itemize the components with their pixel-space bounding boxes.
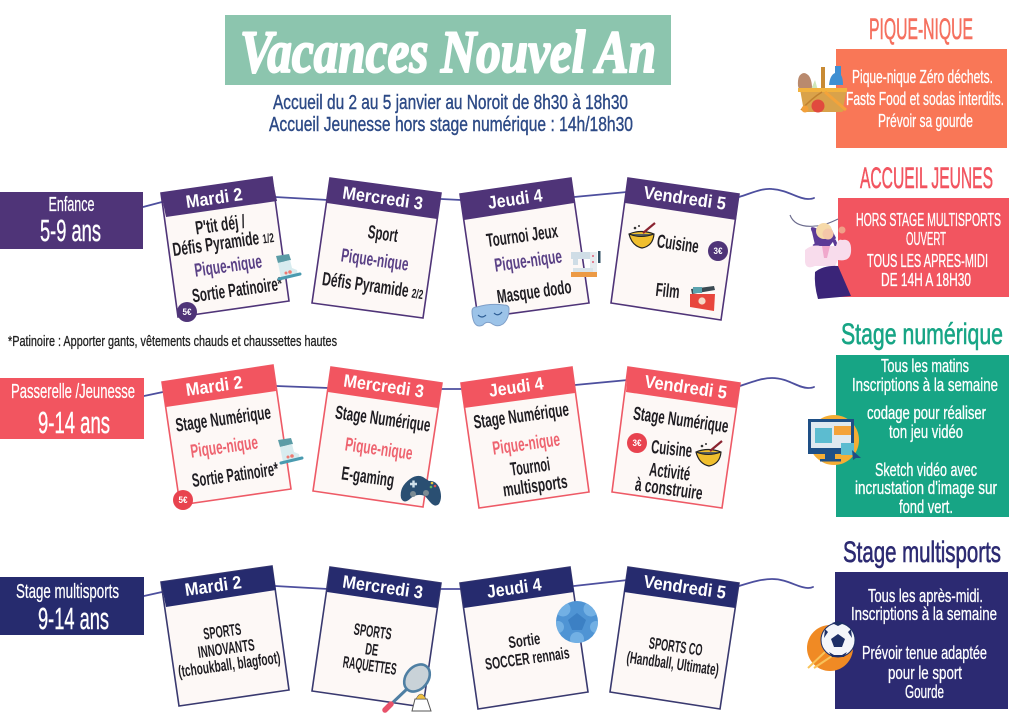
card: Jeudi 4 passerelle: Stage Numérique <box>472 399 570 434</box>
card: Vendredi 5 multisports <box>610 567 739 709</box>
card: Vendredi 5 enfance: Cuisine <box>656 231 700 258</box>
icon: girl with garland <box>790 215 851 299</box>
card: Mardi 2 passerelle: Sortie Patinoire* <box>191 459 280 492</box>
panel: stage numérique: fond vert. <box>899 497 953 517</box>
card: Vendredi 5 passerelle: Activité <box>648 460 691 485</box>
footnote: patinoire: *Patinoire : Apporter gants, vêtements chauds et chaussettes hautes <box>8 334 337 350</box>
card: Jeudi 4 enfance: Masque dodo <box>496 277 573 308</box>
panel: stage multisports: pour le sport <box>888 663 962 683</box>
card: Vendredi 5 enfance: Vendredi 5 <box>642 182 727 214</box>
badge: 3 euros enfance: 3€ <box>714 246 722 256</box>
card: Jeudi 4 passerelle: multisports <box>502 472 569 501</box>
card: Mercredi 3 passerelle <box>313 367 442 507</box>
card: Jeudi 4 enfance: Pique-nique <box>493 246 563 277</box>
card: Mardi 2 enfance: Sortie Patinoire* <box>191 274 284 307</box>
badge: 3 euros passerelle: 3€ <box>632 438 642 448</box>
badge: 3 euros passerelle <box>627 433 647 453</box>
row label: Enfance <box>0 192 143 249</box>
card: Vendredi 5 passerelle: Cuisine <box>650 437 693 462</box>
panel: stage multisports: Tous les après-midi. <box>868 586 983 606</box>
title banner: Vacances Nouvel An <box>240 19 656 85</box>
row label: Stage multisports <box>0 577 144 636</box>
card: Jeudi 4 passerelle: Pique-nique <box>491 429 561 460</box>
panel: accueil jeunes <box>838 162 1009 297</box>
card: Jeudi 4 multisports: SOCCER rennais <box>484 644 571 674</box>
strings row 2 <box>144 378 814 396</box>
row label: Enfance: 5-9 ans <box>40 213 101 248</box>
badge: 5 euros enfance <box>177 302 197 322</box>
card: Mercredi 3 enfance: Pique-nique <box>340 245 410 276</box>
panel: accueil jeunes: OUVERT <box>906 229 946 249</box>
panel: stage numérique: Tous les matins <box>881 356 969 376</box>
row label: Passerelle / Jeunesse <box>0 378 144 440</box>
icon: blue ball <box>556 601 598 643</box>
card: Mercredi 3 multisports: RAQUETTES <box>342 653 398 679</box>
card: Jeudi 4 passerelle: Jeudi 4 <box>488 373 545 401</box>
panel: stage multisports <box>835 536 1008 709</box>
subtitle: Accueil du 2 au 5 janvier au Noroit de 8h30 à 18h30 <box>273 92 628 114</box>
card: Mardi 2 passerelle <box>162 365 291 505</box>
icon: film clapper <box>690 286 715 311</box>
strings row 3 <box>144 579 813 596</box>
card: Mardi 2 multisports: (tchoukball, blagfoot) <box>177 649 282 681</box>
card: Jeudi 4 multisports <box>460 567 588 709</box>
card: Vendredi 5 multisports: (Handball, Ultimate) <box>625 649 720 679</box>
card: Mardi 2 passerelle: Mardi 2 <box>185 372 244 400</box>
icon: sewing machine <box>571 251 600 277</box>
panel: pique-nique: Prévoir sa gourde <box>878 111 973 131</box>
row 3 cards <box>161 566 739 709</box>
card: Mardi 2 enfance: P'tit déj / <box>194 212 247 239</box>
card: Vendredi 5 passerelle: Vendredi 5 <box>643 371 728 403</box>
card: Mardi 2 passerelle: Stage Numérique <box>174 402 272 437</box>
card: Vendredi 5 enfance: Film <box>655 280 681 303</box>
panel: stage multisports: Gourde <box>905 682 944 702</box>
icon: sleep mask <box>472 304 509 326</box>
card: Vendredi 5 passerelle: Stage Numérique <box>632 403 730 438</box>
card: Mardi 2 multisports: INNOVANTS <box>197 636 256 662</box>
card: Jeudi 4 enfance <box>460 178 589 318</box>
card: Mardi 2 passerelle: Pique-nique <box>189 432 259 463</box>
row label: Stage multisports: Stage multisports <box>16 581 119 603</box>
panel: stage numérique: Sketch vidéo avec <box>875 460 977 480</box>
card: Jeudi 4 multisports: Jeudi 4 <box>486 574 543 602</box>
panel: pique-nique <box>836 13 1007 148</box>
card: Mercredi 3 enfance: Défis Pyramide 2/2 <box>321 269 425 304</box>
card: Vendredi 5 multisports: SPORTS CO <box>648 634 704 660</box>
card: Jeudi 4 passerelle: Tournoi <box>509 454 552 481</box>
icon: bowl row 2 <box>696 441 722 466</box>
badge: 5 euros enfance: 5€ <box>182 307 192 317</box>
card: Mercredi 3 enfance: Mercredi 3 <box>341 183 424 214</box>
card: Vendredi 5 passerelle <box>612 367 740 508</box>
card: Jeudi 4 enfance: Tournoi Jeux <box>485 221 560 252</box>
card: Mardi 2 multisports <box>161 566 289 706</box>
row 2 cards <box>162 365 740 508</box>
strings row 1 <box>143 189 814 207</box>
card: Mercredi 3 multisports <box>312 567 441 707</box>
row 1 cards <box>161 177 739 320</box>
icon: soccer ball with flame <box>807 621 855 671</box>
card: Jeudi 4 enfance: Jeudi 4 <box>487 185 544 213</box>
row label: Stage multisports: 9-14 ans <box>38 601 109 636</box>
card: Jeudi 4 multisports: Sortie <box>507 630 541 652</box>
icon: picnic basket <box>798 66 847 112</box>
panel: stage numérique: ton jeu vidéo <box>889 422 963 442</box>
card: Vendredi 5 multisports: Vendredi 5 <box>642 571 727 603</box>
card: Mardi 2 enfance <box>161 177 289 317</box>
badge: 5 euros passerelle: 5€ <box>178 495 188 505</box>
card: Mercredi 3 multisports: DE <box>364 640 379 660</box>
card: Mercredi 3 enfance: Sport <box>366 222 399 247</box>
card: Mercredi 3 passerelle: Mercredi 3 <box>342 371 425 402</box>
row label: Enfance: Enfance <box>48 194 94 216</box>
card: Mercredi 3 passerelle: Stage Numérique <box>334 402 432 437</box>
row label: Passerelle / Jeunesse: Passerelle /Jeunesse <box>11 381 135 403</box>
card: Mercredi 3 enfance <box>312 178 441 318</box>
icon: mixing bowl row 1 <box>629 223 655 248</box>
card: Mardi 2 multisports: SPORTS <box>202 620 242 644</box>
card: Mercredi 3 passerelle: Pique-nique <box>344 434 414 465</box>
card: Mardi 2 enfance: Défis Pyramide 1/2 <box>171 226 275 261</box>
row label: Passerelle / Jeunesse: 9-14 ans <box>38 405 110 440</box>
card: Mercredi 3 multisports: Mercredi 3 <box>341 572 424 603</box>
card: Mercredi 3 passerelle: E-gaming <box>340 463 395 492</box>
subtitle: Accueil Jeunesse hors stage numérique : 14h/18h30 <box>269 114 633 136</box>
card: Vendredi 5 passerelle: à construire <box>634 474 704 505</box>
icon: ice skate row 1 <box>276 254 300 279</box>
icon: game controller <box>401 476 441 506</box>
icon: computer monitor <box>808 415 861 465</box>
card: Mardi 2 enfance: Pique-nique <box>193 251 263 282</box>
panel: stage numérique <box>836 318 1009 517</box>
card: Mardi 2 multisports: Mardi 2 <box>184 572 243 600</box>
card: Vendredi 5 enfance <box>611 178 739 320</box>
card: Jeudi 4 passerelle <box>461 367 589 508</box>
panel: accueil jeunes: DE 14H A 18H30 <box>881 270 971 290</box>
card: Mardi 2 enfance: Mardi 2 <box>185 184 244 212</box>
icon: badminton racket and shuttlecock <box>385 659 435 711</box>
badge: 3 euros enfance <box>708 241 728 261</box>
badge: 5 euros passerelle <box>173 490 193 510</box>
icon: ice skate row 2 <box>278 438 302 463</box>
card: Mercredi 3 multisports: SPORTS <box>353 620 393 644</box>
subtitle <box>269 92 633 136</box>
